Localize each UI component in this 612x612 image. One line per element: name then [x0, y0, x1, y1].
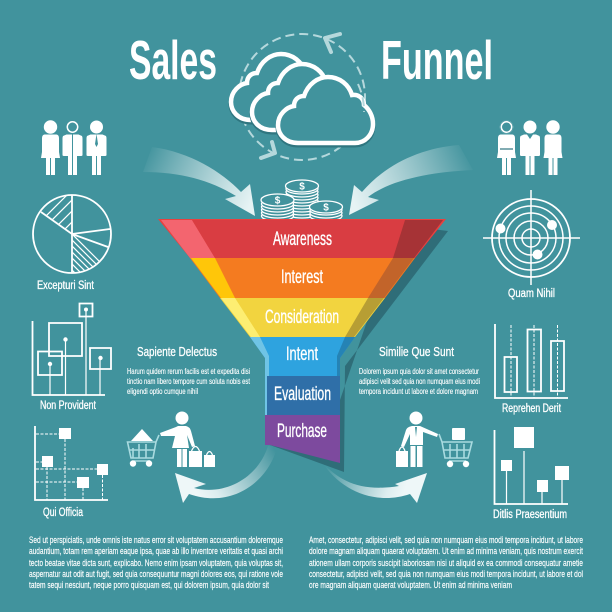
panel: candlestick chart Reprehen Derit: Reprehen Derit [502, 403, 562, 415]
arrow: top right [349, 145, 473, 215]
funnel band: consideration: Consideration [265, 306, 339, 328]
icon: man shopper with cart [396, 412, 472, 467]
arrow: bottom left [175, 446, 277, 503]
panel: bubble chart Non Provident [32, 304, 111, 412]
text block: Similie Que Sunt: Similie Que Sunt [379, 344, 454, 359]
icon: coin stacks [261, 180, 342, 221]
chart: sales funnel [158, 219, 446, 463]
panel: radar Quam Nihil: Quam Nihil [508, 288, 555, 300]
title [129, 29, 493, 91]
text block: bottom left paragraph [29, 535, 283, 591]
panel: bubble chart Non Provident: Non Provident [40, 400, 97, 412]
text block: Sapiente Delectus: Sapiente Delectus [137, 344, 217, 359]
text block: Sapiente Delectus: eligendi optio cumque nihil [127, 387, 198, 396]
funnel shadow [270, 225, 448, 472]
icon: business people left [41, 120, 106, 175]
funnel band: evaluation: Evaluation [274, 383, 331, 405]
icon: clouds with cycle arrows [231, 34, 373, 160]
funnel band: awareness: Awareness [273, 228, 332, 250]
text block: Sapiente Delectus: tinctio nam libero tempore cum soluta nobis est [127, 377, 251, 386]
arrow: bottom right [322, 462, 427, 503]
funnel band: intent: Intent [286, 343, 318, 365]
text block: bottom right paragraph [309, 535, 583, 591]
panel: candlestick chart Reprehen Derit [495, 324, 568, 415]
text block: Similie Que Sunt: Dolorem ipsum quia dolor sit amet consectetur [359, 367, 479, 376]
text block: Similie Que Sunt: adipisci velit sed quia non numquam eius modi [359, 377, 480, 386]
panel: scatter chart Qui Officia: Qui Officia [43, 507, 83, 519]
arrow: top left [143, 147, 255, 216]
panel: pie chart Excepturi Sint: Excepturi Sint [37, 280, 95, 292]
text block: bottom left paragraph: audantium, totam rem aperiam eaque ipsa, quae ab illo inventore veritatis et quasi archi [29, 546, 283, 557]
funnel band: consideration [220, 298, 385, 337]
funnel band: interest [190, 258, 415, 298]
text block: bottom right paragraph: ore magnam aliquam quaerat voluptatem. Ut enim ad minima veniam [309, 580, 512, 591]
icon: coin stacks: $ [299, 182, 305, 192]
text block: bottom left paragraph: tecto beatae vitae dicta sunt, explicabo. Nemo enim ipsam voluptatem, quia voluptas sit, [29, 558, 283, 569]
icon: business people right [497, 120, 562, 175]
funnel band: awareness [158, 219, 446, 258]
panel: column markers Ditlis Praesentium [493, 427, 569, 521]
funnel band: interest: Interest [281, 266, 323, 288]
panel: pie chart Excepturi Sint [32, 194, 112, 292]
text block: Sapiente Delectus [127, 344, 251, 396]
text block: Similie Que Sunt: tempora incidunt ut labore et dolore magnam [359, 387, 478, 396]
text block: bottom left paragraph: aspernatur aut odit aut fugit, sed quia consequuntur magni dolores eos, qui ratione vole [29, 569, 283, 580]
funnel band: purchase [265, 415, 340, 463]
funnel band: evaluation [265, 376, 340, 415]
text block: bottom left paragraph: Sed ut perspiciatis, unde omnis iste natus error sit voluptatem accusantium doloremque [29, 535, 283, 546]
icon: coin stacks: $ [323, 202, 329, 214]
panel: column markers Ditlis Praesentium: Ditlis Praesentium [493, 509, 567, 521]
funnel band: purchase: Purchase [277, 420, 327, 442]
title: Sales [129, 29, 217, 91]
title: Funnel [381, 29, 493, 91]
icon: woman shopper with cart [128, 412, 215, 467]
funnel band: intent [250, 337, 355, 376]
icon: coin stacks: $ [275, 196, 281, 206]
text block: Similie Que Sunt [359, 344, 480, 396]
text block: Sapiente Delectus: Harum quidem rerum facilis est et expedita disi [127, 367, 250, 376]
panel: scatter chart Qui Officia [35, 426, 108, 519]
panel: radar Quam Nihil [483, 190, 580, 300]
text block: bottom left paragraph: tatem sequi nesciunt, neque porro quisquam est, qui dolorem ipsum, quia dolor sit [29, 580, 269, 591]
